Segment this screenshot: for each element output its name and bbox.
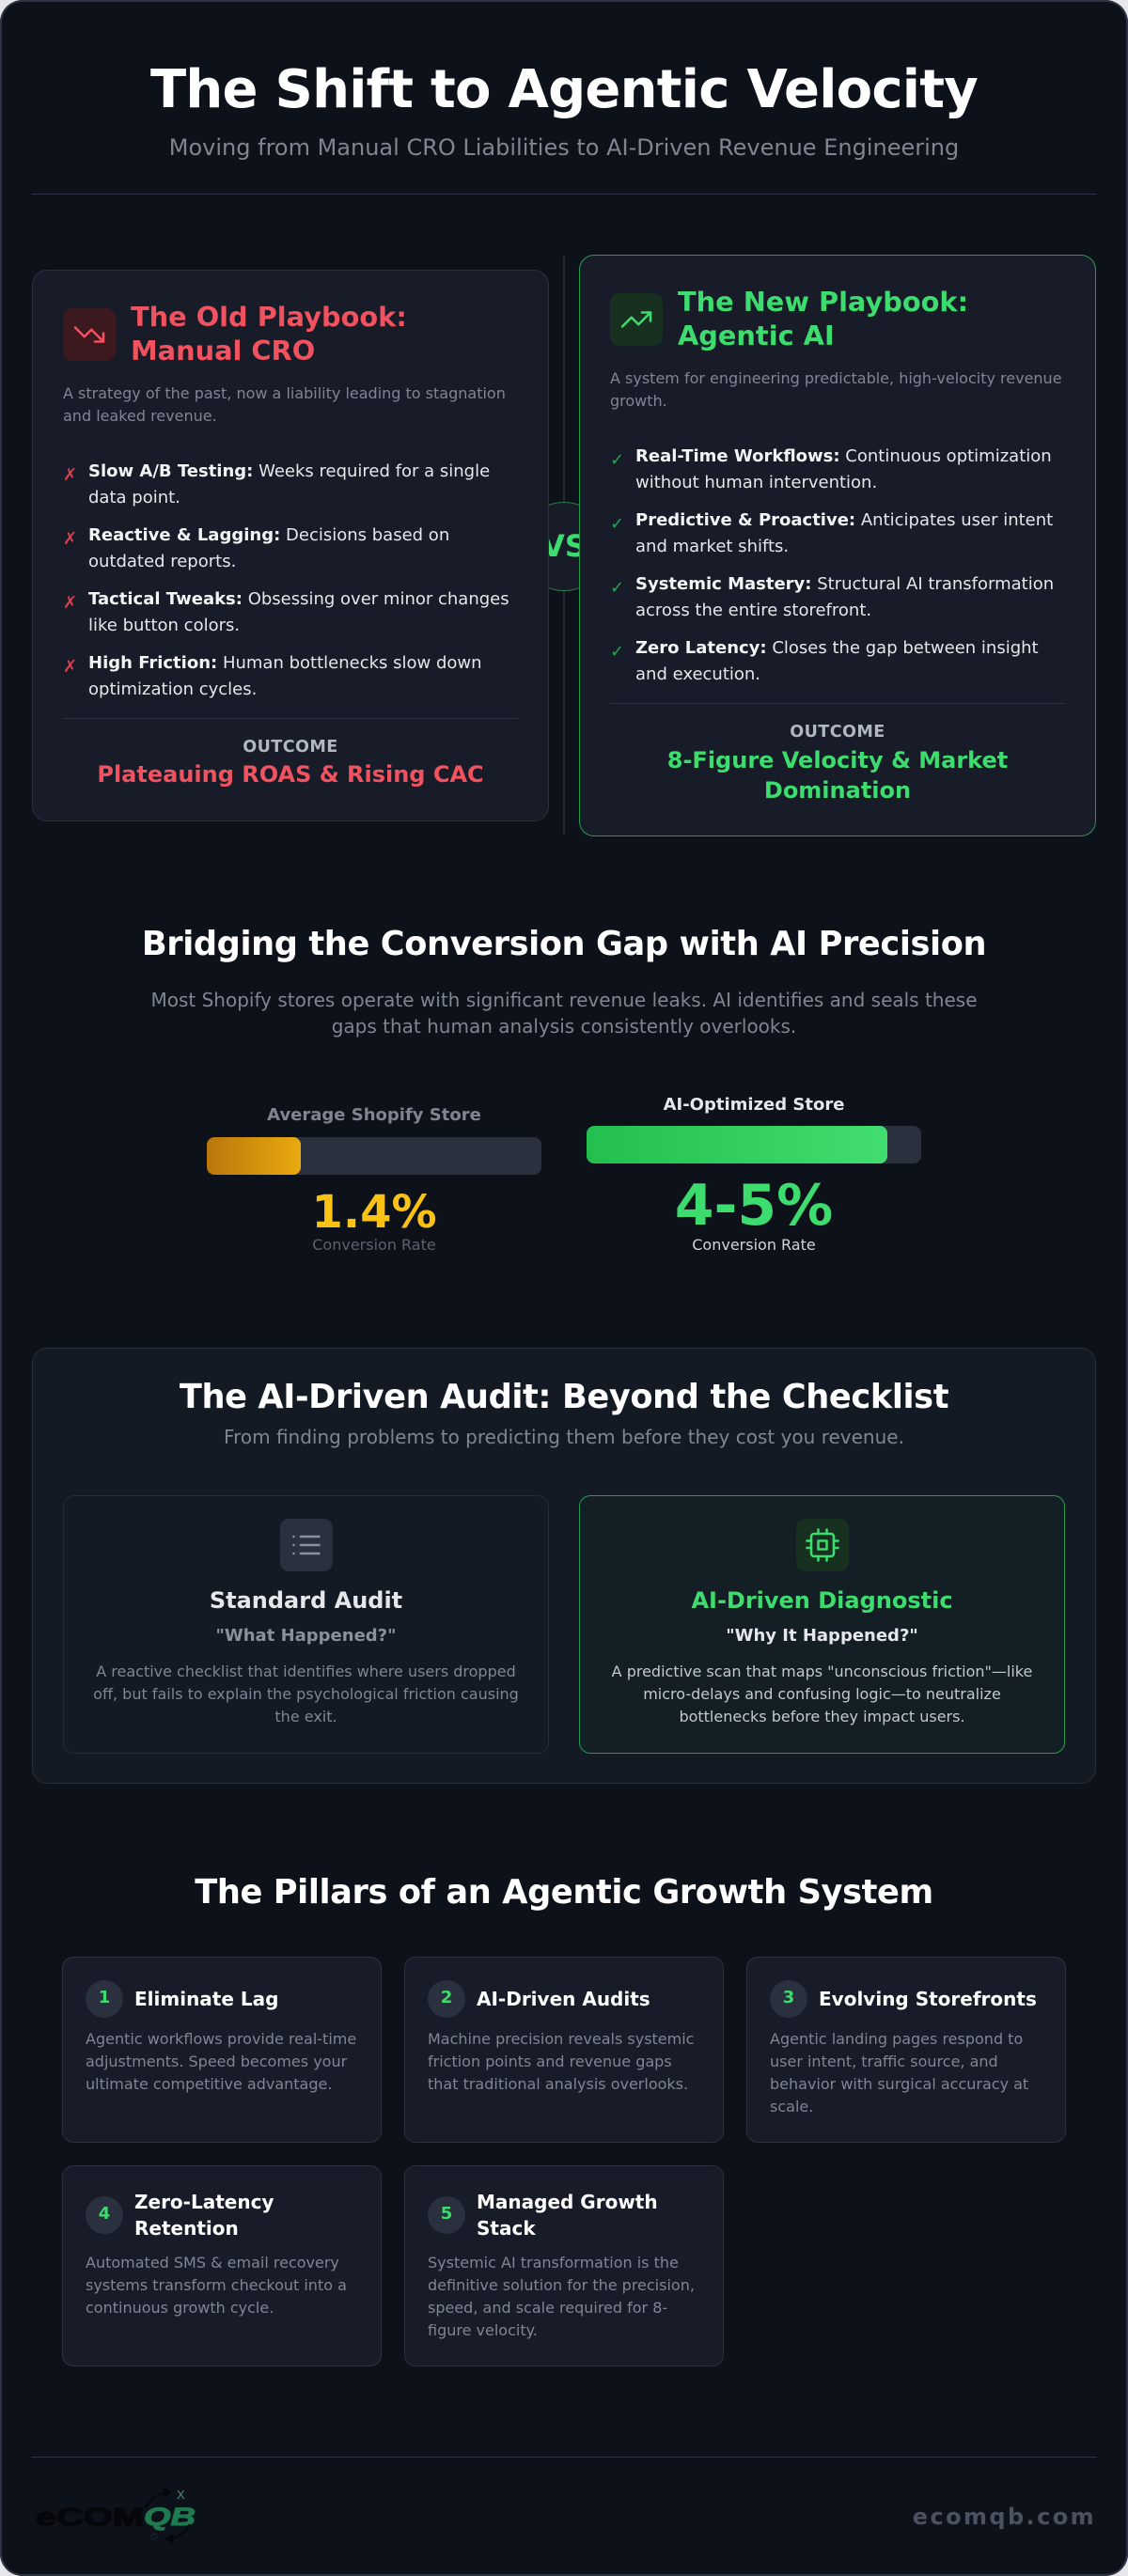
description: off, but fails to explain the psychological friction causing	[93, 1685, 519, 1703]
title: AI-Driven Diagnostic	[691, 1587, 953, 1614]
number	[428, 2196, 465, 2234]
description: bottlenecks before they impact users.	[679, 1708, 965, 1725]
card: standard audit	[63, 1495, 549, 1754]
item: Reactive & Lagging: Decisions based on	[88, 525, 449, 545]
panel: new playbook	[579, 255, 1096, 836]
footer logo: X	[177, 2488, 185, 2502]
pillar text	[770, 2030, 1028, 2115]
item	[635, 638, 1039, 684]
pillar text: Agentic landing pages respond to	[770, 2030, 1023, 2048]
icon: trending up	[610, 293, 663, 346]
pillar text	[428, 2030, 694, 2093]
section: pillars	[62, 1873, 1066, 2366]
heading: The AI-Driven Audit: Beyond the Checklist	[180, 1378, 948, 1416]
label: AI-Optimized Store	[664, 1095, 844, 1115]
marker: ✗	[63, 529, 77, 549]
new playbook heading: Agentic AI	[678, 320, 835, 351]
item: High Friction: Human bottlenecks slow down	[88, 653, 482, 673]
bar	[207, 1137, 541, 1175]
pillar text: Agentic workflows provide real-time	[86, 2030, 356, 2048]
item	[635, 574, 1054, 620]
pillar text	[86, 2030, 356, 2093]
description: gaps that human analysis consistently overlooks.	[332, 1015, 796, 1038]
pillar text: systems transform checkout into a	[86, 2276, 347, 2294]
footer url: ecomqb.com	[913, 2504, 1096, 2530]
pillar 5	[404, 2165, 724, 2366]
marker: ✗	[63, 465, 77, 485]
description: A reactive checklist that identifies where users dropped	[96, 1663, 516, 1680]
pillar 3	[746, 1957, 1066, 2143]
pillar title: Retention	[134, 2217, 239, 2240]
pillar text: behavior with surgical accuracy at	[770, 2075, 1028, 2093]
outcome label: OUTCOME	[243, 738, 338, 757]
caption: Conversion Rate	[692, 1236, 816, 1254]
pillar title: Zero-Latency	[134, 2191, 274, 2213]
item: across the entire storefront.	[635, 601, 871, 620]
pillar text	[428, 2254, 695, 2339]
pillar 4	[62, 2165, 382, 2366]
vs badge: VS	[541, 528, 587, 564]
card: ai diagnostic	[579, 1495, 1065, 1754]
pillar text: Systemic AI transformation is the	[428, 2254, 679, 2272]
marker: ✓	[610, 642, 624, 662]
number: 4	[99, 2204, 110, 2224]
bar	[587, 1126, 921, 1163]
outcome label: OUTCOME	[790, 723, 885, 742]
item: and execution.	[635, 664, 760, 684]
old playbook heading: Manual CRO	[131, 335, 315, 367]
number: 5	[441, 2204, 452, 2224]
subheading: From finding problems to predicting them before they cost you revenue.	[224, 1426, 904, 1448]
marker: ✓	[610, 514, 624, 534]
pillar text: friction points and revenue gaps	[428, 2053, 672, 2070]
number	[86, 1980, 123, 2018]
label: Average Shopify Store	[267, 1105, 481, 1125]
item: data point.	[88, 488, 180, 507]
marker: ✓	[610, 578, 624, 598]
pillar title: Stack	[477, 2217, 536, 2240]
old playbook heading: The Old Playbook:	[131, 301, 407, 333]
icon: chip	[796, 1519, 849, 1571]
number	[428, 1980, 465, 2018]
number: 2	[441, 1988, 452, 2007]
pillar text: definitive solution for the precision,	[428, 2276, 695, 2294]
footer logo: QB	[144, 2503, 196, 2531]
description	[611, 1663, 1032, 1725]
marker: ✗	[63, 657, 77, 677]
title: The Shift to Agentic Velocity	[150, 59, 978, 120]
pillar text	[86, 2254, 347, 2317]
header	[150, 59, 978, 161]
pillar title: Evolving Storefronts	[819, 1988, 1037, 2010]
description	[150, 989, 978, 1038]
panel: audit	[32, 1348, 1096, 1784]
footer logo	[36, 2488, 196, 2543]
old playbook description: A strategy of the past, now a liability leading to stagnation	[63, 384, 506, 402]
number	[86, 2196, 123, 2234]
item: Slow A/B Testing: Weeks required for a single	[88, 461, 490, 481]
number: 3	[783, 1988, 794, 2007]
pillar title: Managed Growth	[477, 2191, 658, 2213]
new playbook description: growth.	[610, 392, 667, 410]
description: A predictive scan that maps "unconscious friction"—like	[612, 1663, 1032, 1680]
heading: The Pillars of an Agentic Growth System	[195, 1873, 933, 1912]
item: Predictive & Proactive: Anticipates user intent	[635, 510, 1053, 530]
new playbook description	[610, 369, 1062, 410]
number: 1	[99, 1988, 110, 2007]
pillar 1	[62, 1957, 382, 2143]
pillar text: Machine precision reveals systemic	[428, 2030, 694, 2048]
item: Zero Latency: Closes the gap between insight	[635, 638, 1039, 658]
subtitle: Moving from Manual CRO Liabilities to AI-Driven Revenue Engineering	[169, 134, 959, 161]
marker: ✗	[63, 593, 77, 613]
panel: old playbook	[32, 270, 549, 821]
section: conversion gap	[142, 925, 986, 1254]
item: Systemic Mastery: Structural AI transformation	[635, 574, 1054, 594]
description: the exit.	[274, 1708, 337, 1725]
pillar text: speed, and scale required for 8-	[428, 2299, 667, 2317]
item: without human intervention.	[635, 473, 877, 492]
old playbook description: and leaked revenue.	[63, 407, 217, 425]
outcome value: Plateauing ROAS & Rising CAC	[97, 761, 484, 788]
pillar text: continuous growth cycle.	[86, 2299, 274, 2317]
tagline: "What Happened?"	[216, 1626, 396, 1646]
marker: ✓	[610, 450, 624, 470]
value: 4-5%	[675, 1173, 833, 1239]
item	[88, 589, 509, 635]
pillar text: Automated SMS & email recovery	[86, 2254, 339, 2272]
title: Standard Audit	[210, 1587, 402, 1614]
heading: Bridging the Conversion Gap with AI Precision	[142, 925, 986, 963]
description: micro-delays and confusing logic—to neutralize	[643, 1685, 1001, 1703]
outcome value	[667, 747, 1008, 804]
item: and market shifts.	[635, 537, 789, 556]
item	[88, 525, 449, 571]
pillar text: adjustments. Speed becomes your	[86, 2053, 347, 2070]
new playbook heading	[678, 286, 968, 351]
pillar title: AI-Driven Audits	[477, 1988, 650, 2010]
item	[88, 461, 490, 507]
new playbook description: A system for engineering predictable, high-velocity revenue	[610, 369, 1062, 387]
new playbook heading: The New Playbook:	[678, 286, 968, 318]
number	[770, 1980, 807, 2018]
outcome value: Domination	[764, 777, 911, 804]
metric: ai store	[587, 1095, 921, 1254]
pillar title	[134, 2191, 274, 2240]
pillar title	[477, 2191, 658, 2240]
tagline: "Why It Happened?"	[726, 1626, 918, 1646]
icon: list	[280, 1519, 333, 1571]
old playbook heading	[131, 301, 407, 367]
item: like button colors.	[88, 616, 240, 635]
pillar text: that traditional analysis overlooks.	[428, 2075, 688, 2093]
value: 1.4%	[311, 1186, 437, 1239]
item: optimization cycles.	[88, 679, 257, 699]
item: outdated reports.	[88, 552, 236, 571]
pillar text: figure velocity.	[428, 2321, 538, 2339]
caption: Conversion Rate	[312, 1236, 436, 1254]
icon: trending down	[63, 308, 116, 361]
description	[93, 1663, 519, 1725]
item	[635, 510, 1053, 556]
pillar 2	[404, 1957, 724, 2143]
vs badge	[519, 502, 609, 591]
item: Real-Time Workflows: Continuous optimization	[635, 446, 1052, 466]
pillar text: user intent, traffic source, and	[770, 2053, 998, 2070]
pillar text: ultimate competitive advantage.	[86, 2075, 332, 2093]
description: Most Shopify stores operate with significant revenue leaks. AI identifies and seals these	[150, 989, 978, 1011]
pillar title: Eliminate Lag	[134, 1988, 278, 2010]
old playbook description	[63, 384, 506, 425]
footer logo: eCOM	[36, 2503, 144, 2531]
item	[88, 653, 482, 699]
outcome value: 8-Figure Velocity & Market	[667, 747, 1008, 773]
pillar text: scale.	[770, 2098, 813, 2115]
item: Tactical Tweaks: Obsessing over minor changes	[88, 589, 509, 609]
item	[635, 446, 1052, 492]
metric: average store	[207, 1105, 541, 1254]
